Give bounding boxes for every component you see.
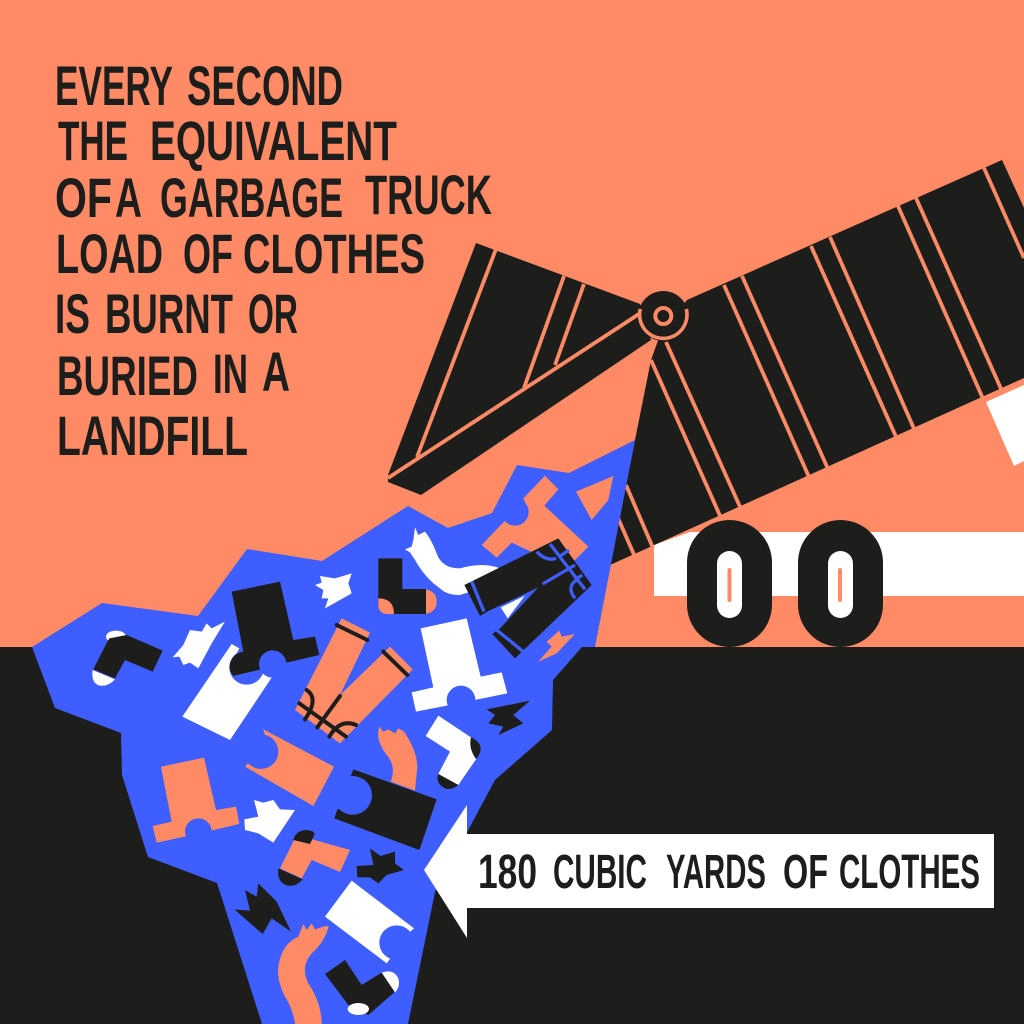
title: IS <box>55 282 90 345</box>
orange arrow shard <box>576 476 613 520</box>
clothes: left items <box>92 582 319 740</box>
callout text: YARDS <box>666 846 766 899</box>
title: BURNT <box>105 282 233 345</box>
truck white panel <box>986 385 1024 466</box>
callout text: 180 <box>478 846 537 899</box>
orange sock <box>278 830 350 886</box>
title: EQUIVALENT <box>150 109 397 172</box>
title: A <box>115 166 142 229</box>
black tank top <box>333 769 437 850</box>
orange t-shirt <box>482 476 588 560</box>
wheel 1 <box>687 520 772 647</box>
black jeans <box>464 538 592 658</box>
white tank top <box>182 644 275 740</box>
orange scarf <box>278 923 329 1024</box>
title: OR <box>248 282 298 345</box>
title: EVERY <box>55 54 173 117</box>
callout text: CUBIC <box>553 846 647 899</box>
white tank top <box>325 881 414 963</box>
orange scarf <box>378 727 417 791</box>
title: TRUCK <box>365 163 492 226</box>
clothes: lower items <box>153 727 437 1024</box>
callout text <box>478 846 980 899</box>
orange lightning shard <box>538 631 575 662</box>
garbage truck <box>388 160 1024 647</box>
black crown shard <box>234 883 291 934</box>
title: LANDFILL <box>57 404 248 467</box>
callout arrow <box>424 805 994 938</box>
black sock <box>92 631 163 686</box>
white shard <box>315 573 352 608</box>
black sock <box>325 960 399 1015</box>
white sock <box>426 716 481 789</box>
hinge <box>638 291 688 341</box>
title: LOAD <box>56 222 163 285</box>
white crown shard <box>244 800 295 843</box>
title: SECOND <box>187 54 343 117</box>
black sock <box>378 558 437 614</box>
title: OF <box>183 222 233 285</box>
clothes: upper items <box>315 476 613 789</box>
title: A <box>262 340 290 403</box>
title: IN <box>213 342 248 405</box>
orange tank top <box>244 729 334 806</box>
title: THE <box>58 109 128 172</box>
title <box>55 54 492 467</box>
black boot <box>230 582 319 678</box>
white shard <box>173 622 225 668</box>
orange trousers <box>295 618 413 743</box>
wheel 2 <box>798 520 883 647</box>
truck container body <box>610 160 1024 565</box>
tailgate door <box>388 243 651 495</box>
title: CLOTHES <box>243 222 425 285</box>
truck chassis <box>654 532 1024 596</box>
clothes pile <box>32 440 635 1024</box>
orange boot <box>153 758 239 845</box>
title: GARBAGE <box>160 166 343 229</box>
title: BURIED <box>57 344 198 407</box>
title: OF <box>55 166 112 229</box>
white scarf <box>405 527 500 595</box>
black lightning shard <box>487 701 530 735</box>
white boot <box>412 618 507 714</box>
callout text: OF <box>783 846 828 899</box>
black star shard <box>357 848 404 883</box>
